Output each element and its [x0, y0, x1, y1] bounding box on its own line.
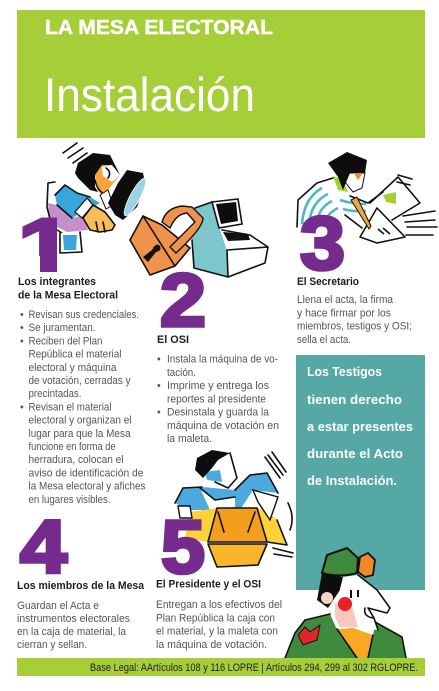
callout text: de Instalación.	[307, 473, 397, 488]
panel: el presidente y el OSI	[156, 578, 282, 651]
bullet list: Imprime y entrega los	[167, 380, 269, 392]
step 3 number: 3	[300, 201, 345, 285]
illustration: people closing the box	[175, 450, 293, 567]
heading: El Presidente y el OSI	[156, 578, 261, 590]
callout text: Los Testigos	[307, 364, 382, 379]
bullet list: •	[20, 322, 24, 334]
illustration: padlock and voting machine	[130, 199, 268, 277]
heading: de la Mesa Electoral	[18, 290, 118, 302]
bullet list: la maleta.	[167, 433, 212, 445]
bullet list: •	[157, 407, 161, 419]
body text: Guardan el Acta e	[17, 600, 99, 612]
bullet list: en lugares visibles.	[28, 494, 110, 506]
panel: los miembros de la mesa	[17, 580, 144, 651]
bullet list: •	[20, 335, 24, 347]
header banner	[17, 10, 425, 138]
bullet list: máquina de votación en	[167, 420, 279, 432]
bullet list: aviso de identificación de	[28, 467, 144, 479]
bullet list: •	[20, 401, 24, 413]
callout text: tienen derecho	[307, 392, 402, 407]
step 1 number: 1	[18, 203, 74, 287]
bullet list: la Mesa electoral y afiches	[28, 481, 146, 493]
body text: instrumentos electorales	[17, 613, 130, 625]
bullet list: Revisan el material	[28, 401, 112, 413]
bullet list: •	[157, 380, 161, 392]
bullet list: Se juramentan.	[28, 322, 96, 334]
body text: Llena el acta, la firma	[297, 294, 393, 306]
body text: miembros, testigos y OSI;	[297, 321, 412, 333]
bullet list: de votación, cerradas y	[28, 375, 131, 387]
body text	[297, 294, 412, 346]
bullet list: electoral y organizan el	[28, 415, 132, 427]
bullet list	[20, 309, 146, 506]
panel: el OSI	[157, 334, 279, 445]
body text: Plan República la caja con	[156, 612, 275, 624]
bullet list: •	[157, 354, 161, 366]
step 5 number: 5	[161, 505, 205, 589]
bullet list: Desinstala y guarda la	[167, 407, 269, 419]
body text: y hace firmar por los	[297, 307, 391, 319]
bullet list: Revisan sus credenciales.	[28, 309, 139, 321]
bullet list: funcione en forma de	[28, 441, 116, 453]
bullet list: Reciben del Plan	[28, 335, 103, 347]
title: LA MESA ELECTORAL	[45, 17, 273, 39]
bullet list: lugar para que la Mesa	[28, 428, 131, 440]
heading: Instalación: Instalación	[44, 68, 255, 121]
callout text	[307, 364, 413, 488]
bullet list: herradura, colocan el	[28, 454, 124, 466]
panel: los integrantes	[18, 276, 146, 506]
bullet list: tación.	[167, 367, 196, 379]
bullet list: •	[20, 309, 24, 321]
bullet list: precintadas.	[28, 388, 82, 400]
panel: el secretario	[297, 276, 412, 346]
step 4 number: 4	[20, 504, 67, 588]
body text: Entregan a los efectivos del	[156, 599, 282, 611]
body text	[17, 600, 130, 651]
bullet list: reportes al presidente	[167, 393, 266, 405]
body text: el material, y la maleta con	[156, 626, 278, 638]
bullet list: electoral y máquina	[28, 362, 117, 374]
step 2 number: 2	[160, 258, 206, 342]
callout text: durante el Acto	[307, 446, 403, 461]
illustration: soldier	[285, 548, 406, 658]
heading: Los integrantes	[18, 276, 96, 288]
illustration: person with magnifying glass	[47, 143, 149, 253]
body text: en la caja de material, la	[17, 626, 126, 638]
heading: Los miembros de la Mesa	[17, 580, 144, 592]
panel: testigos callout	[296, 355, 425, 590]
callout text: a estar presentes	[307, 419, 413, 434]
bullet list	[157, 354, 279, 445]
heading	[18, 276, 118, 302]
heading: El Secretario	[297, 276, 359, 288]
body text: sella el acta.	[297, 334, 351, 346]
footer bar: legal basis	[17, 658, 425, 676]
heading: El OSI	[157, 334, 189, 346]
body text: la máquina de votación.	[156, 639, 267, 651]
illustration: secretary writing	[297, 152, 437, 243]
body text	[156, 599, 282, 651]
bullet list: Instala la máquina de vo-	[167, 354, 278, 366]
body text: cierran y sellan.	[17, 639, 87, 651]
bullet list: República el material	[28, 349, 122, 361]
